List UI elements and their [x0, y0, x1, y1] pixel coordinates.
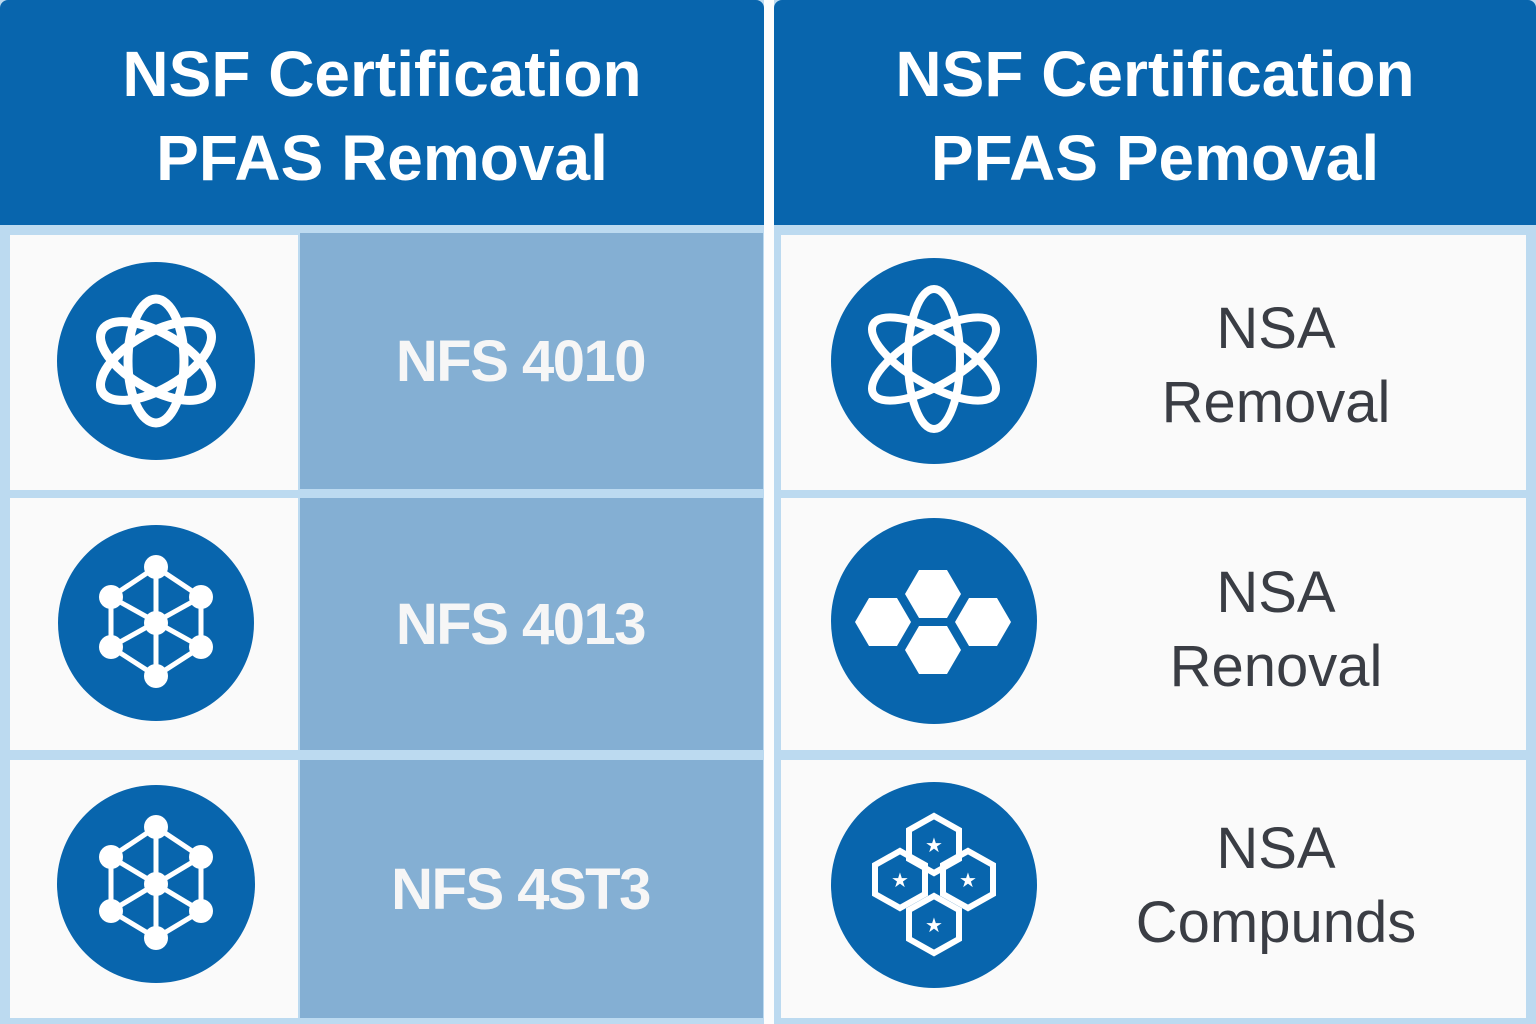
row 1 code: NFS 4010 [396, 328, 645, 394]
row 2 code [300, 498, 763, 750]
row 1 icon cell [10, 235, 298, 490]
left header: PFAS Removal [156, 122, 608, 194]
row 3: ★ [925, 835, 943, 857]
row 3 [781, 760, 1526, 1018]
left header [0, 0, 764, 225]
panel: left [0, 0, 764, 1024]
row 3: ★ [959, 870, 977, 892]
right header: PFAS Pemoval [931, 122, 1379, 194]
row 2 icon cell [10, 498, 298, 750]
row 3: Compunds [1136, 890, 1416, 955]
row 2 code: NFS 4013 [396, 592, 645, 656]
row 1: Removal [1162, 370, 1390, 435]
row 3 code [300, 760, 763, 1018]
row 3 icon cell [10, 760, 298, 1018]
row 2: Renoval [1170, 634, 1382, 699]
row 3: ★ [925, 915, 943, 937]
row 3 code: NFS 4ST3 [391, 856, 650, 922]
right header [774, 0, 1536, 225]
row 2 [781, 498, 1526, 750]
left header: NSF Certification [122, 38, 642, 110]
panel: right [774, 0, 1536, 1024]
row 1 [781, 235, 1526, 490]
right header: NSF Certification [895, 38, 1415, 110]
row 2: NSA [1216, 560, 1336, 625]
row 3: ★ [891, 870, 909, 892]
row 3: NSA [1216, 816, 1336, 881]
row 1 code [300, 233, 763, 489]
row 1: NSA [1216, 296, 1336, 361]
